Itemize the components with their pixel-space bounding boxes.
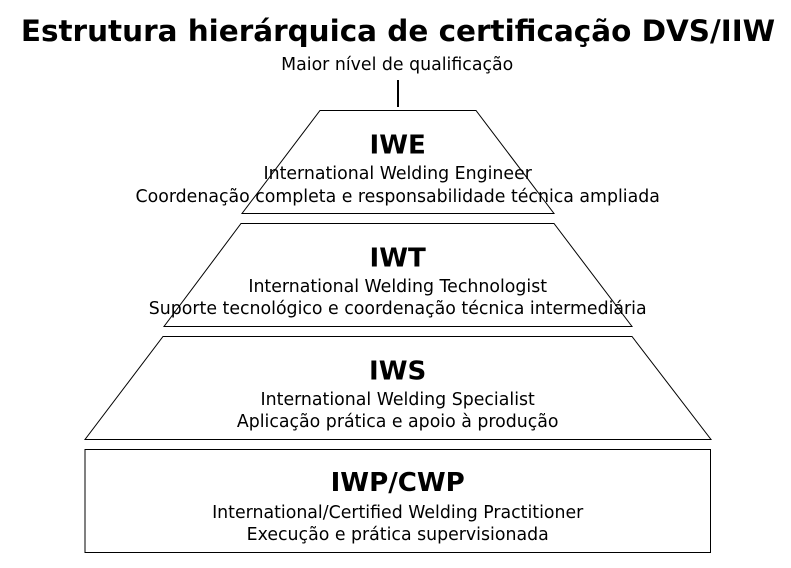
panel: IWS: International Welding Specialist [261,390,535,410]
panel: IWS: Aplicação prática e apoio à produção [237,412,559,432]
arrow: top indicator line [397,80,399,107]
panel: IWE [136,110,660,214]
panel: IWE: IWE [370,130,426,160]
panel: IWT: International Welding Technologist [248,277,547,297]
panel: IWT: Suporte tecnológico e coordenação técnica intermediária [149,299,647,319]
panel: IWP/CWP: IWP/CWP [331,468,465,498]
panel: IWT [149,224,647,326]
panel: IWS [85,336,711,440]
panel: IWP/CWP: International/Certified Welding Practitioner [212,503,584,523]
panel: IWS: IWS [369,356,426,386]
panel: IWP/CWP [85,450,710,552]
panel: IWE: Coordenação completa e responsabilidade técnica ampliada [136,187,660,207]
title: Estrutura hierárquica de certificação DVS/IIW [21,14,775,48]
panel: IWE: International Welding Engineer [263,164,533,184]
panel: IWP/CWP: Execução e prática supervisionada [247,525,549,545]
top label: Maior nível de qualificação [281,55,513,75]
panel: IWT: IWT [370,244,426,274]
